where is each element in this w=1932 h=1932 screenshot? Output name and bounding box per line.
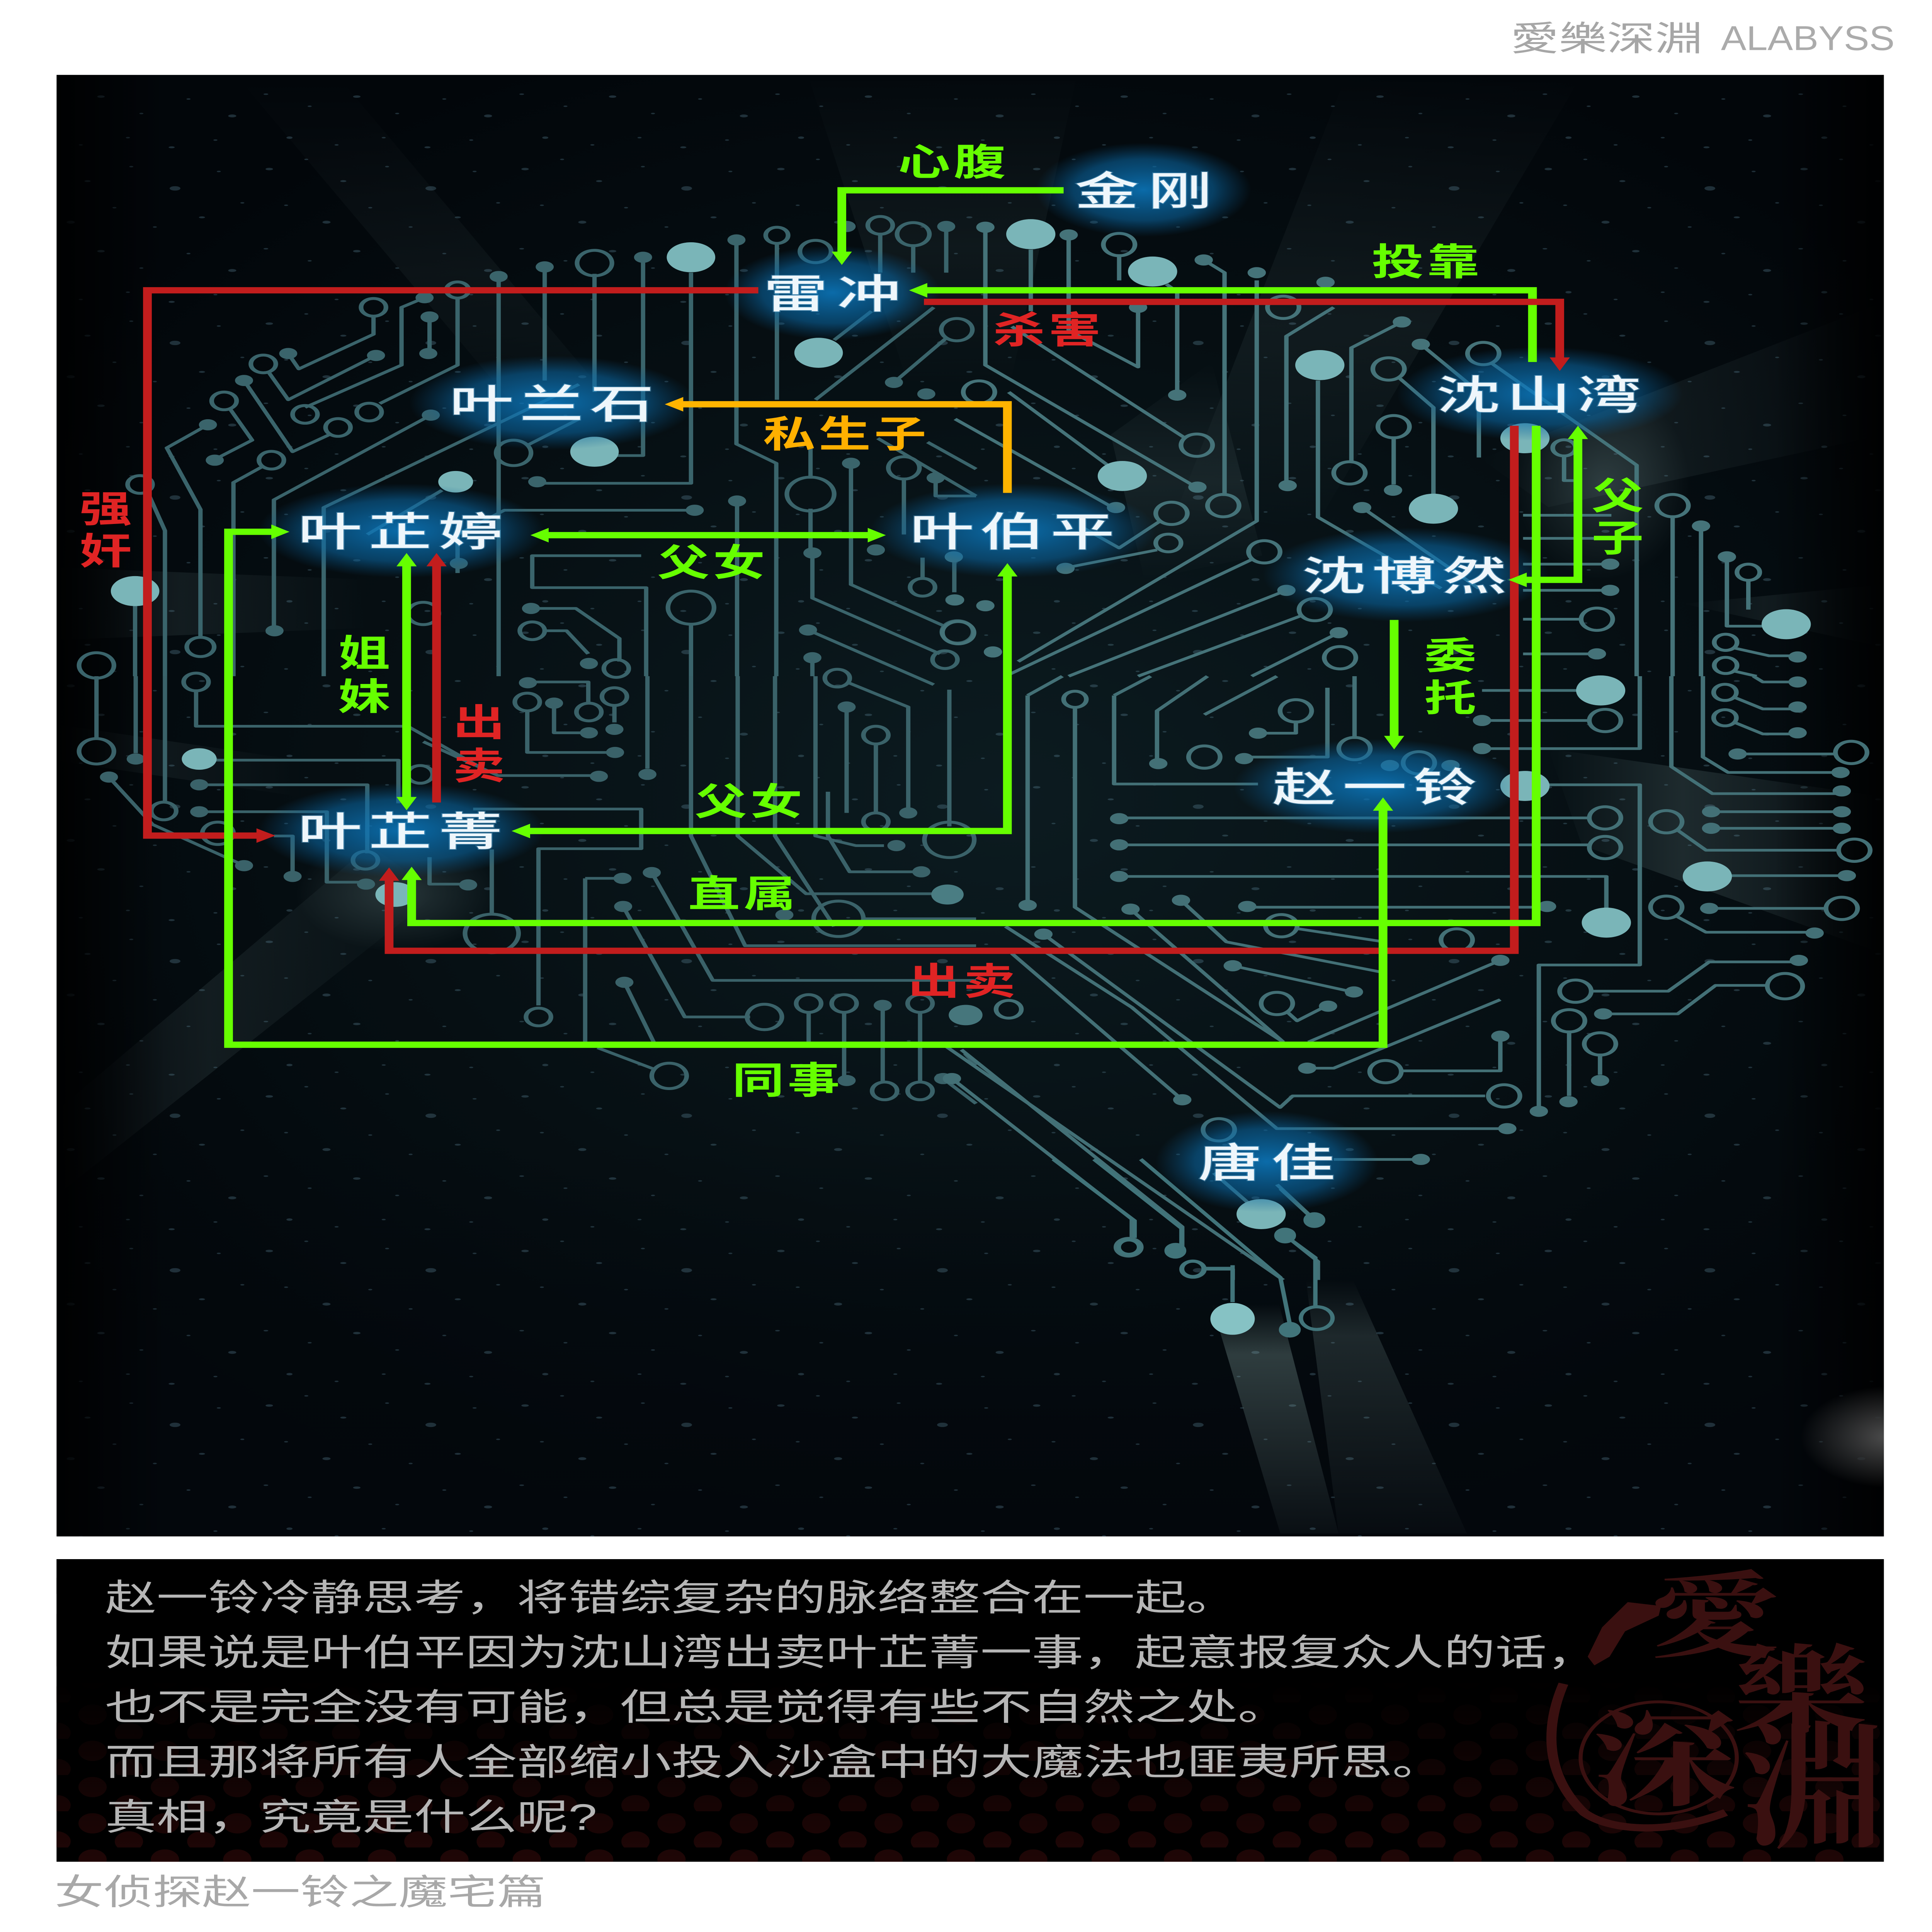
watermark logo: 深 — [1592, 1704, 1737, 1820]
relation labels: 私生子 — [763, 413, 930, 455]
header brand text — [1510, 19, 1895, 58]
circuit traces: upper left — [79, 216, 976, 685]
relation labels: 强奸 — [80, 488, 132, 572]
character names: 赵一铃 — [1272, 765, 1483, 810]
narration text: 如果说是叶伯平因为沈山湾出卖叶芷菁一事，起意报复众人的话， — [105, 1632, 1598, 1673]
panel: circuit relationship diagram — [56, 75, 1932, 1536]
relation labels: 同事 — [732, 1060, 843, 1102]
arrow: 直属 — [401, 426, 1536, 923]
narration text — [105, 1577, 1598, 1838]
relation labels: 姐妹 — [338, 633, 390, 718]
arrow: 出卖 叶芷菁 to 叶芷婷 — [427, 553, 447, 803]
relation labels: 父子 — [1592, 475, 1644, 559]
panel: narration — [56, 1559, 1885, 1865]
relation labels — [80, 141, 1644, 1102]
relation labels: 投靠 — [1372, 241, 1483, 283]
arrow: 父女 叶芷婷 叶伯平 — [531, 528, 886, 543]
relation labels: 杀害 — [993, 310, 1104, 351]
arrow: 出卖 沈山湾 to 叶芷菁 — [379, 426, 1514, 951]
arrow: 父子 — [1509, 426, 1588, 587]
circuit traces: lower left — [79, 669, 976, 1104]
relation labels: 委托 — [1424, 635, 1476, 719]
arrow: 心腹 — [832, 190, 1064, 265]
character names: 叶芷菁 — [298, 810, 509, 854]
circuit traces: upper right — [942, 227, 1798, 676]
arrow: 投靠 — [909, 283, 1532, 362]
watermark logo: 愛 — [1649, 1566, 1781, 1670]
character names — [298, 169, 1647, 1186]
arrow: 姐妹 — [396, 553, 417, 810]
light beams below the circuit — [1220, 1295, 1455, 1533]
relation labels: 父女 — [657, 542, 769, 584]
character names: 叶芷婷 — [298, 510, 509, 555]
arrow: 杀害 — [924, 302, 1570, 371]
circuit traces: lower right — [942, 676, 1870, 1280]
arrow: 父女 叶伯平 叶芷菁 — [512, 563, 1017, 838]
watermark logo: 樂 — [1733, 1639, 1876, 1747]
narration text: 也不是完全没有可能，但总是觉得有些不自然之处。 — [105, 1687, 1289, 1728]
relation labels: 出卖 — [908, 961, 1019, 1002]
relation labels: 出卖 — [453, 702, 505, 787]
character names: 唐佳 — [1198, 1141, 1345, 1186]
character names: 雷冲 — [764, 272, 910, 317]
relation labels: 直属 — [688, 873, 799, 915]
arrow: 私生子 — [665, 397, 1007, 493]
name glows — [259, 143, 1683, 1213]
narration text: 真相，究竟是什么呢? — [105, 1796, 597, 1838]
bottom right lens glow — [1811, 1392, 1884, 1482]
character names: 叶兰石 — [449, 382, 660, 427]
watermark logo — [1551, 1566, 1885, 1865]
footer title: 女侦探赵一铃之魔宅篇 — [54, 1873, 546, 1912]
narration text: 赵一铃冷静思考，将错综复杂的脉络整合在一起。 — [105, 1577, 1238, 1619]
character names: 叶伯平 — [910, 510, 1121, 555]
watermark logo: 淵 — [1743, 1713, 1885, 1865]
arrow: 强奸 — [148, 290, 759, 843]
character names: 沈博然 — [1302, 554, 1513, 599]
arrow: 同事 — [228, 525, 1393, 1045]
character names: 沈山湾 — [1436, 373, 1647, 418]
relation labels: 心腹 — [898, 141, 1009, 183]
narration text: 而且那将所有人全部缩小投入沙盒中的大魔法也匪夷所思。 — [105, 1742, 1444, 1783]
circuit traces: bottom tail — [1053, 1159, 1333, 1336]
header brand text: 愛樂深淵 — [1510, 19, 1703, 58]
relation labels: 父女 — [695, 781, 806, 823]
arrow: 委托 — [1384, 620, 1404, 749]
character names: 金刚 — [1075, 169, 1221, 214]
